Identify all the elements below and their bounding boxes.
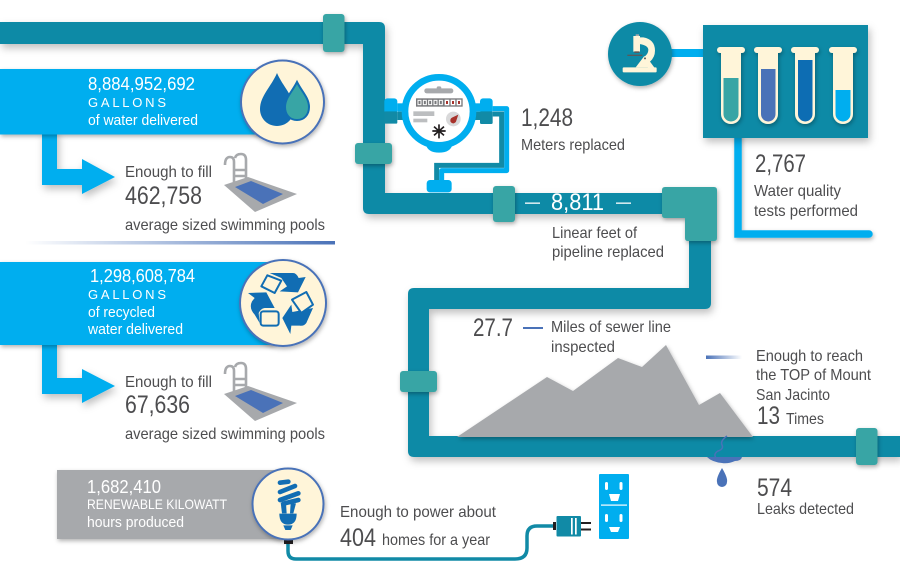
text: swimming pools equivalent: 462,758	[125, 182, 202, 210]
panel: water delivered	[0, 60, 325, 234]
icon: test tube 1	[717, 47, 745, 124]
text: homes powered: Enough to power about	[340, 504, 497, 521]
text: homes powered: 404	[340, 524, 376, 552]
stat: sewer miles: 27.7	[473, 314, 513, 342]
panel: renewable energy	[57, 468, 629, 559]
pipe joint: top	[323, 14, 344, 52]
stat: sewer miles	[473, 314, 671, 356]
icon: mountain	[457, 345, 753, 437]
panel: water quality	[608, 22, 869, 234]
pipe joint: sewer left	[400, 371, 437, 392]
water pipeline	[0, 14, 900, 465]
icon: water drops	[241, 60, 324, 144]
stat: recycled gallons: of recycled	[88, 304, 155, 321]
icon: plug	[553, 516, 591, 536]
banner: water delivered	[0, 69, 262, 134]
icon: light bulb	[252, 468, 324, 540]
stat: water quality tests: tests performed	[754, 203, 858, 220]
arrow: water to pools	[42, 130, 115, 194]
stat: sewer miles: Miles of sewer line	[551, 319, 671, 336]
icon: test tube 4	[829, 47, 857, 124]
text: mount san jacinto: Enough to reach	[756, 348, 863, 365]
text: mount san jacinto: the TOP of Mount	[756, 367, 872, 384]
text: mount san jacinto: Times	[786, 411, 824, 428]
stat: kilowatt hours: hours produced	[87, 514, 184, 531]
stat: kilowatt hours: 1,682,410	[87, 477, 161, 497]
stat: leaks detected: Leaks detected	[757, 501, 854, 518]
stat: kilowatt hours: RENEWABLE KILOWATT	[87, 496, 227, 512]
stat: recycled gallons: water delivered	[87, 321, 183, 338]
text: recycled pools equivalent	[125, 374, 325, 443]
icon: swimming pool	[224, 363, 297, 421]
icon: pipe leak	[707, 436, 742, 487]
text: recycled pools equivalent: Enough to fill	[125, 374, 212, 391]
stat: meters replaced: Meters replaced	[521, 137, 625, 154]
test tubes box	[703, 25, 868, 138]
icon: outlet	[599, 474, 629, 539]
icon: water meter	[384, 77, 507, 192]
stat: water quality tests	[754, 150, 858, 220]
text: swimming pools equivalent: Enough to fill	[125, 164, 212, 181]
icon: test tube 3	[791, 47, 819, 124]
stat: pipeline replaced: pipeline replaced	[552, 244, 664, 261]
banner: recycled water	[0, 262, 274, 345]
pipe elbow joint	[662, 187, 717, 241]
pipe joint: left vertical	[355, 143, 392, 164]
stat: gallons delivered: of water delivered	[88, 112, 198, 129]
stat: sewer miles: inspected	[551, 339, 615, 356]
stat: leaks detected	[757, 474, 854, 518]
stat: meters replaced: 1,248	[521, 104, 573, 132]
stat: water quality tests: 2,767	[755, 150, 806, 178]
text: mount san jacinto: San Jacinto	[756, 387, 830, 404]
pipe joint: bottom of vertical	[493, 186, 515, 222]
connector line to text	[738, 130, 869, 234]
pipe joint: sewer right	[856, 428, 878, 465]
text: mount san jacinto	[756, 348, 872, 430]
icon: microscope	[608, 22, 672, 86]
text: mount san jacinto: 13	[757, 402, 780, 430]
panel: recycled water	[0, 260, 326, 443]
stat: leaks detected: 574	[757, 474, 792, 502]
text: swimming pools equivalent	[125, 164, 325, 234]
text: swimming pools equivalent: average sized swimming pools	[125, 217, 325, 234]
stat: kilowatt hours	[87, 477, 227, 531]
stat: gallons delivered: GALLONS	[88, 95, 166, 110]
stat: gallons delivered: 8,884,952,692	[88, 74, 195, 94]
power cord	[288, 526, 556, 559]
icon: test tube 2	[754, 47, 782, 124]
text: homes powered: homes for a year	[382, 532, 491, 549]
text: recycled pools equivalent: average sized swimming pools	[125, 426, 325, 443]
stat: recycled gallons: 1,298,608,784	[90, 266, 195, 286]
icon: swimming pool	[224, 154, 297, 212]
banner: kilowatt hours	[57, 470, 282, 539]
stat: pipeline replaced	[525, 189, 664, 261]
stat: recycled gallons	[87, 266, 195, 338]
stat: water quality tests: Water quality	[754, 183, 841, 200]
stat: meters replaced	[521, 104, 625, 154]
panel: sewer line	[457, 314, 872, 518]
text: homes powered	[340, 504, 497, 552]
arrow: recycled water to pools	[42, 340, 115, 403]
text: recycled pools equivalent: 67,636	[125, 391, 190, 419]
stat: gallons delivered	[88, 74, 198, 129]
stat: pipeline replaced: 8,811	[551, 189, 604, 216]
icon: recycling	[240, 260, 326, 346]
stat: recycled gallons: GALLONS	[88, 287, 166, 302]
stat: pipeline replaced: Linear feet of	[552, 225, 637, 242]
